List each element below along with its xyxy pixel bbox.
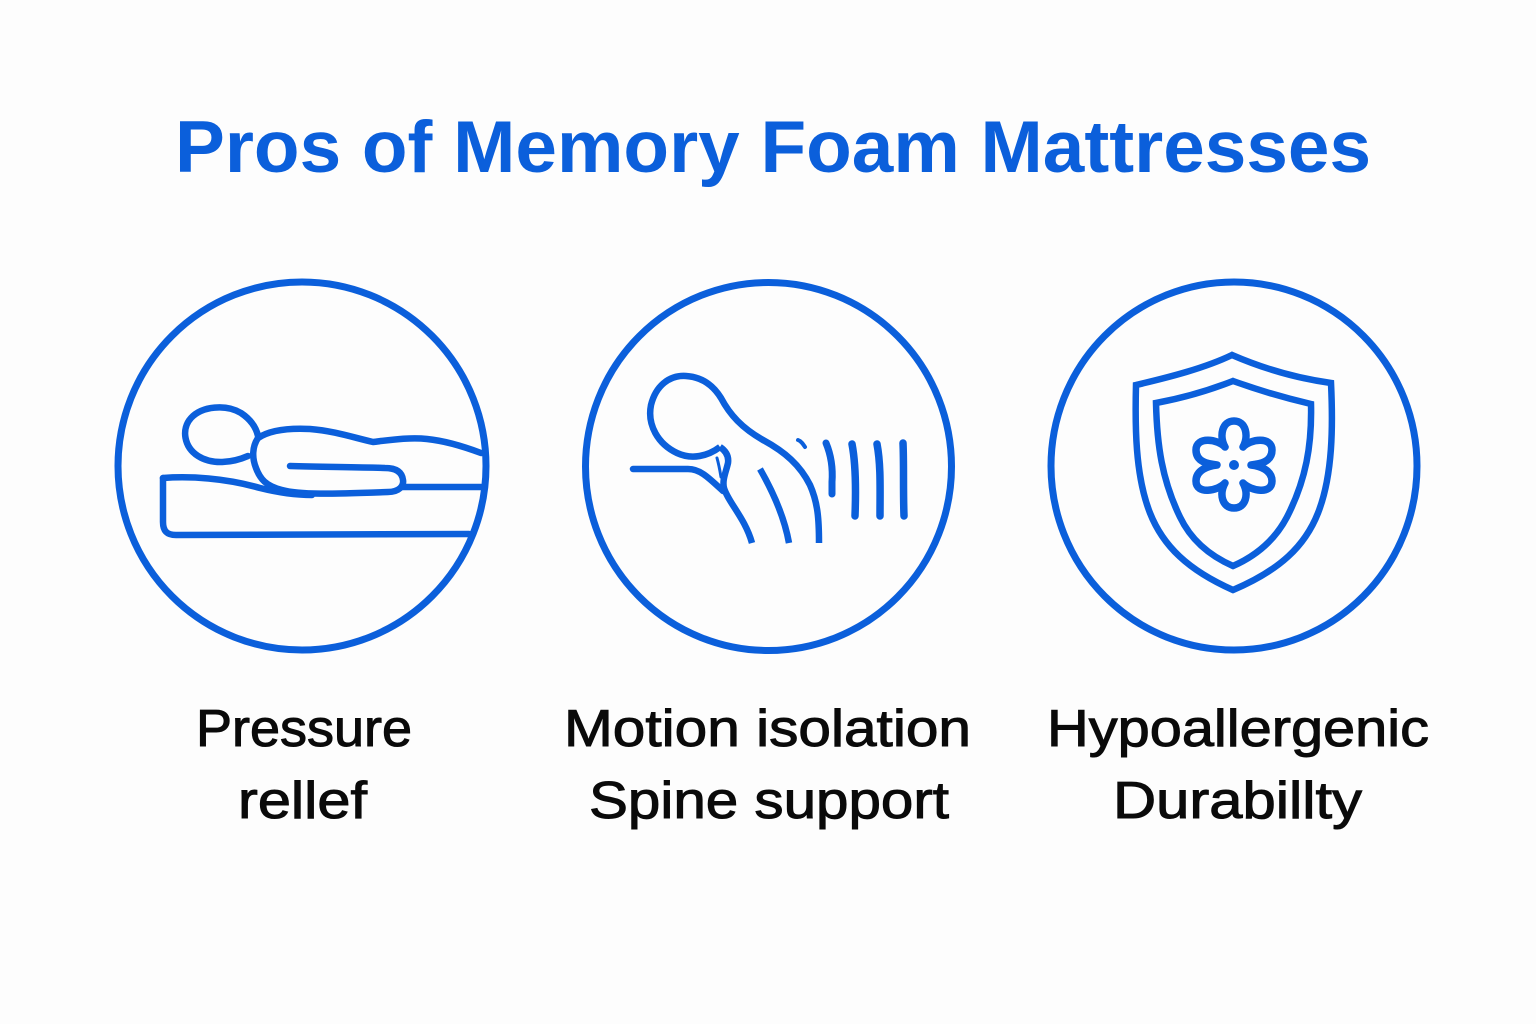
panel: hypoallergenic and durability — [1047, 282, 1429, 830]
label: hypoallergenic, durability: Hypoallergenic — [1047, 700, 1429, 758]
icon: shield with flower — [1051, 282, 1417, 650]
label: hypoallergenic, durability — [1047, 700, 1429, 830]
label: motion isolation, spine support — [564, 700, 971, 830]
panel: motion isolation and spine support — [564, 282, 971, 830]
panel: pressure relief — [118, 282, 486, 830]
label: pressure relief — [196, 700, 412, 830]
label: hypoallergenic, durability: Durabillty — [1113, 772, 1362, 830]
label: pressure relief: rellef — [238, 772, 368, 830]
label: pressure relief: Pressure — [196, 700, 412, 758]
icon: person lying on mattress — [118, 282, 486, 650]
title: Pros of Memory Foam Mattresses — [175, 107, 1371, 188]
icon: head and spine with motion lines — [586, 282, 952, 650]
label: motion isolation, spine support: Spine support — [589, 772, 950, 830]
label: motion isolation, spine support: Motion isolation — [564, 700, 971, 758]
